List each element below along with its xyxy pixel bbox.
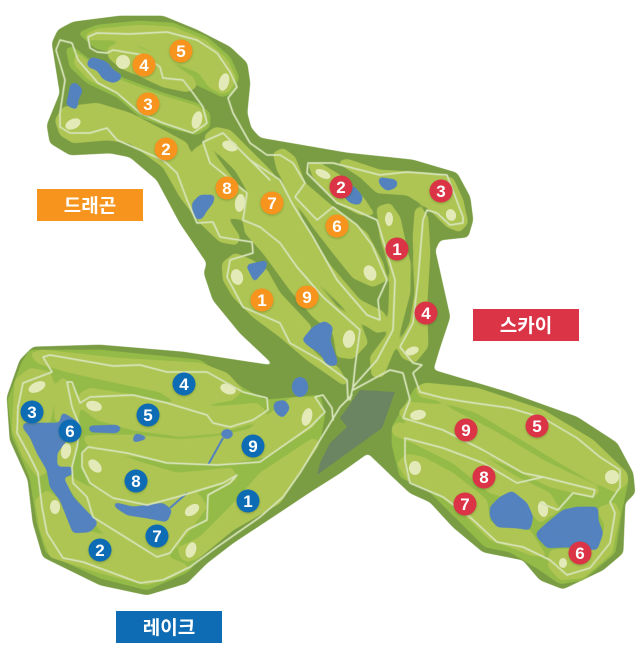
marker: dragon 2: [154, 138, 178, 160]
marker: sky 9: [454, 418, 478, 442]
marker: lake 2: 2: [95, 541, 105, 560]
marker: dragon 6: [326, 214, 348, 238]
marker: dragon 3: [136, 92, 160, 116]
marker: lake 1: 1: [243, 492, 253, 511]
water: lake pond north: [292, 377, 308, 397]
rough: lake nine: [8, 350, 325, 590]
marker: dragon 5: 5: [176, 42, 186, 61]
water: lake 9 pond: [221, 429, 233, 439]
marker: lake 8: 8: [131, 472, 141, 491]
fairway: lake 1: [178, 438, 320, 562]
marker: dragon 4: 4: [139, 56, 149, 75]
clubhouse area: [317, 390, 395, 475]
marker: sky 6: 6: [575, 544, 585, 563]
cart paths: [17, 32, 620, 583]
rough: dragon upper: [78, 21, 239, 97]
marker: sky 1: 1: [392, 240, 402, 259]
marker: lake 4: [172, 372, 196, 396]
marker: sky 2: 2: [336, 178, 346, 197]
label: sky: 스카이: [500, 315, 552, 337]
marker: dragon 7: [260, 192, 284, 214]
fairway: lake 4: [30, 350, 243, 405]
marker: dragon 7: 7: [267, 194, 277, 213]
marker: dragon 9: 9: [302, 288, 312, 307]
marker: lake 6: 6: [65, 422, 75, 441]
fairway: dragon 2: [55, 103, 240, 245]
water: dragon 1: [246, 260, 268, 283]
marker: dragon 8: 8: [222, 179, 232, 198]
fairway: dragon 6: [273, 148, 387, 287]
fairway: sky 4: [397, 206, 430, 363]
fairway: dragon 4: [108, 43, 197, 92]
marker: sky 3: 3: [436, 182, 446, 201]
fairway: lake 6: [55, 377, 80, 468]
marker: dragon 6: 6: [332, 217, 342, 236]
marker: lake 5: [136, 404, 160, 426]
marker: sky 8: 8: [479, 468, 489, 487]
water: lake main: [23, 412, 98, 533]
markers: lake course: [20, 372, 264, 562]
marker: lake 9: [242, 434, 264, 458]
marker: dragon 4: [132, 54, 156, 76]
label: sky: [473, 309, 579, 341]
fairway: south 9: [398, 402, 600, 497]
water: lake small: [88, 425, 122, 433]
marker: lake 7: 7: [152, 527, 162, 546]
fairway: sky 3: [337, 159, 468, 232]
marker: sky 6: [568, 542, 592, 564]
fairway: lake 9: [83, 397, 323, 465]
water: lake triangle: [132, 433, 150, 443]
water: dragon 3: [66, 82, 83, 110]
marker: dragon 5: [170, 40, 192, 62]
water: south 6: [536, 507, 603, 550]
label: dragon: [37, 189, 143, 221]
marker: lake 1: [236, 490, 260, 512]
marker: lake 4: 4: [179, 375, 189, 394]
fairway: dragon 3: [74, 52, 207, 132]
marker: lake 5: 5: [143, 406, 153, 425]
water: lake 8: [113, 502, 172, 522]
marker: sky 7: 7: [460, 495, 470, 514]
marker: dragon 1: [250, 288, 274, 312]
markers: dragon course: [132, 40, 348, 312]
water: dragon 9: [302, 321, 337, 366]
marker: dragon 3: 3: [143, 95, 153, 114]
stream: [170, 438, 223, 508]
rough: south nine: [392, 383, 628, 584]
marker: sky 9: 9: [461, 421, 471, 440]
marker: dragon 8: [216, 176, 238, 200]
fairway: dragon 9: [243, 217, 368, 359]
water: dragon 8: [192, 195, 215, 220]
markers: sky course: [330, 176, 592, 564]
bunkers: [27, 55, 619, 568]
marker: sky 8: [472, 466, 496, 488]
marker: sky 4: 4: [421, 304, 431, 323]
fairway: dragon 1: [222, 253, 348, 385]
marker: lake 8: [124, 470, 148, 492]
fairway: lake 2: [35, 490, 190, 585]
marker: sky 4: [414, 302, 438, 324]
marker: lake 7: [146, 524, 168, 548]
fairway: lake 8: [82, 448, 237, 505]
water hazards: [23, 57, 603, 550]
marker: sky 5: [526, 414, 548, 438]
fairway: dragon 8: [193, 142, 252, 220]
marker: lake 2: [88, 538, 112, 562]
rough: dragon hole 3: [66, 47, 210, 135]
marker: lake 3: 3: [27, 403, 37, 422]
fairway: dragon 7: [205, 127, 388, 333]
fairway: sky 2: [308, 163, 375, 215]
marker: sky 2: [330, 176, 352, 198]
marker: dragon 2: 2: [161, 140, 171, 159]
fairway: lake 3: [12, 368, 55, 477]
marker: lake 3: [20, 400, 44, 424]
label: lake: 레이크: [143, 617, 195, 639]
fairway: lake 5: [80, 388, 267, 436]
marker: lake 9: 9: [248, 437, 258, 456]
water: south 8: [490, 491, 533, 530]
label: dragon: 드래곤: [64, 195, 116, 217]
fairway: south 6: [548, 502, 620, 580]
water: dragon 4: [87, 57, 122, 83]
water: lake pond: [274, 400, 290, 418]
marker: lake 6: [58, 420, 82, 442]
marker: sky 1: [386, 238, 408, 260]
fairway: lake 7: [63, 475, 207, 557]
marker: sky 7: [454, 492, 476, 516]
fairway: sky 1: [370, 203, 410, 377]
marker: dragon 9: [296, 286, 318, 308]
marker: dragon 1: 1: [257, 291, 267, 310]
water: sky 2: [343, 185, 363, 205]
fairway: south 8: [392, 422, 560, 523]
fairway: dragon 5: [85, 25, 236, 94]
label: lake: [116, 611, 222, 643]
marker: sky 3: [430, 180, 452, 202]
fairway: south 5: [415, 383, 628, 493]
fairway: south 7: [397, 454, 547, 557]
marker: sky 5: 5: [532, 417, 542, 436]
water: sky pond: [378, 177, 397, 191]
